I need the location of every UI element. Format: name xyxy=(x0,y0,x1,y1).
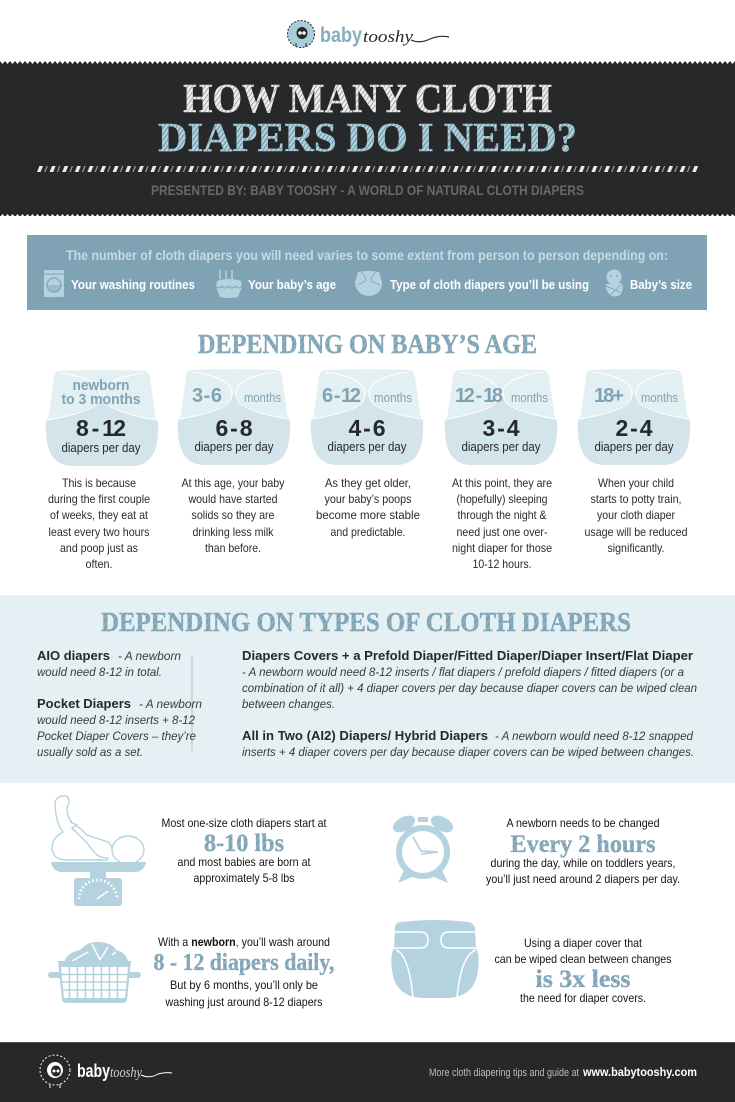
card: 12-18 months: need just one over- xyxy=(456,525,548,539)
text: weight: Most one-size cloth diapers start at xyxy=(162,816,327,830)
logo: baby tooshy top: tooshy xyxy=(363,27,414,46)
text: all in two: - A newborn would need 8-12 snapped xyxy=(495,729,693,743)
card: 6-12 months: As they get older, xyxy=(325,476,411,490)
card: 12-18 months: months xyxy=(511,390,548,405)
text: AIO diapers: AIO diapers xyxy=(37,648,110,663)
text: washing: But by 6 months, you’ll only be xyxy=(170,978,318,992)
card: newborn: to 3 months xyxy=(62,391,140,408)
text: weight: and most babies are born at xyxy=(178,855,311,869)
card: newborn xyxy=(46,370,158,571)
footer link text: More cloth diapering tips and guide at xyxy=(429,1067,579,1079)
text: frequency: Every 2 hours xyxy=(510,831,656,858)
card: 18+ months: months xyxy=(641,390,678,405)
card: 3-6 months: 3 - 6 xyxy=(192,385,222,407)
text: all in two xyxy=(242,728,694,759)
card: 18+ months: significantly. xyxy=(608,541,664,555)
card: 6-12 months: and predictable. xyxy=(330,525,406,539)
card: 3-6 months: solids so they are xyxy=(192,508,275,522)
icon: cloth diaper xyxy=(355,271,382,296)
logo: baby tooshy footer xyxy=(40,1055,172,1088)
text: covers + prefold: - A newborn would need 8-12 inserts / flat diapers / prefold diapers / fitted diapers (or a xyxy=(242,665,684,679)
text: pocket diapers: Pocket Diaper Covers – they’re xyxy=(37,729,196,743)
text: all in two: All in Two (AI2) Diapers/ Hybrid Diapers xyxy=(242,728,488,743)
panel: factors xyxy=(27,235,707,310)
card: 18+ months: diapers per day xyxy=(594,439,674,454)
text: all in two: inserts + 4 diaper covers per day because diaper covers can be wiped between changes. xyxy=(242,745,694,759)
text: covers + prefold xyxy=(242,648,697,711)
text: AIO diapers: - A newborn xyxy=(118,649,181,663)
icon: baby on scale xyxy=(51,796,146,906)
text: frequency: you’ll just need around 2 diapers per day. xyxy=(486,872,680,886)
card: 18+ months: your cloth diaper xyxy=(597,508,675,522)
subtitle: PRESENTED BY: BABY TOOSHY - A WORLD OF NATURAL CLOTH DIAPERS xyxy=(151,182,584,198)
text: covers + prefold: between changes. xyxy=(242,697,335,711)
card: 6-12 months xyxy=(311,369,423,539)
fact: washing xyxy=(48,935,334,1009)
label: washing: Your washing routines xyxy=(71,278,195,292)
card: 3-6 months: 6 - 8 xyxy=(216,415,253,441)
card: 18+ months: 2 - 4 xyxy=(616,415,653,441)
card: newborn: of weeks, they eat at xyxy=(50,508,149,522)
card: 3-6 months: months xyxy=(244,390,281,405)
icon: alarm clock xyxy=(390,812,456,883)
text: cover: is 3x less xyxy=(536,966,631,993)
icon: swaddled baby xyxy=(606,270,623,296)
card: 6-12 months: your baby’s poops xyxy=(324,492,412,506)
heading: types: DEPENDING ON TYPES OF CLOTH DIAPERS xyxy=(101,607,631,637)
card: newborn: newborn xyxy=(72,377,130,394)
card: 12-18 months xyxy=(445,369,557,571)
label: size: Baby’s size xyxy=(630,278,692,292)
logo: baby tooshy footer: baby xyxy=(77,1061,110,1081)
card: 12-18 months: 12 - 18 xyxy=(455,385,503,407)
logo: baby tooshy footer: tooshy xyxy=(110,1065,142,1081)
card: 18+ months: 18+ xyxy=(594,385,624,407)
title: HOW MANY CLOTH xyxy=(183,75,552,121)
logo: baby tooshy top xyxy=(288,20,449,48)
footer link text: www.babytooshy.com xyxy=(582,1067,697,1079)
card: newborn: This is because xyxy=(62,476,136,490)
icon: laundry basket xyxy=(48,942,141,1003)
fact: baby weight xyxy=(51,796,327,906)
card: 18+ months: usage will be reduced xyxy=(584,525,688,539)
text: AIO diapers: would need 8-12 in total. xyxy=(37,665,162,679)
card: newborn: least every two hours xyxy=(48,525,150,539)
header band xyxy=(0,61,735,217)
card: 6-12 months: months xyxy=(374,390,412,405)
card: newborn: and poop just as xyxy=(60,541,138,555)
text: washing: With a newborn, you’ll wash around xyxy=(158,935,330,949)
logo: baby tooshy top: baby xyxy=(320,24,362,47)
text: covers + prefold: Diapers Covers + a Prefold Diaper/Fitted Diaper/Diaper Insert/Flat Diaper xyxy=(242,648,693,663)
text: frequency xyxy=(486,816,680,886)
fact: changing frequency xyxy=(390,812,680,886)
card: 6-12 months: 4 - 6 xyxy=(348,415,386,441)
card: 3-6 months: would have started xyxy=(188,492,278,506)
card: 12-18 months: night diaper for those xyxy=(452,541,552,555)
card: 3-6 months xyxy=(178,369,290,555)
card: newborn: diapers per day xyxy=(62,440,141,455)
text: covers + prefold: combination of it all) + 4 diaper covers per day because diaper covers can be wiped clean xyxy=(242,681,697,695)
text: pocket diapers xyxy=(37,696,202,759)
card: 3-6 months: diapers per day xyxy=(194,439,274,454)
card: 18+ months: When your child xyxy=(598,476,674,490)
card: newborn: often. xyxy=(86,557,112,571)
text: pocket diapers: would need 8-12 inserts + 8-12 xyxy=(37,713,195,727)
card: 6-12 months: become more stable xyxy=(316,508,420,522)
card: 3-6 months: drinking less milk xyxy=(192,525,274,539)
fact: diaper cover xyxy=(391,920,672,1005)
card: 12-18 months: At this point, they are xyxy=(452,476,552,490)
text: cover: Using a diaper cover that xyxy=(524,936,643,950)
text: frequency: during the day, while on toddlers years, xyxy=(490,856,676,870)
footer link text xyxy=(429,1067,697,1079)
footer xyxy=(0,1042,735,1102)
text: frequency: A newborn needs to be changed xyxy=(506,816,660,830)
label: type: Type of cloth diapers you’ll be using xyxy=(390,278,589,292)
panel: types of cloth diapers xyxy=(0,595,735,783)
card: newborn: during the first couple xyxy=(48,492,150,506)
text: cover: can be wiped clean between changes xyxy=(494,952,672,966)
title xyxy=(158,75,577,160)
card: 3-6 months: At this age, your baby xyxy=(182,476,284,490)
card: 3-6 months: than before. xyxy=(205,541,261,555)
factors intro: The number of cloth diapers you will need varies to some extent from person to person depending on: xyxy=(66,247,668,263)
card: 6-12 months: 6 - 12 xyxy=(322,385,361,407)
card: 12-18 months: diapers per day xyxy=(462,439,541,454)
card: 12-18 months: (hopefully) sleeping xyxy=(456,492,548,506)
text: washing: 8 - 12 diapers daily, xyxy=(154,950,334,976)
text: pocket diapers: - A newborn xyxy=(139,697,202,711)
title: DIAPERS DO I NEED? xyxy=(158,114,577,160)
text: cover xyxy=(494,936,672,1005)
icon: cake xyxy=(216,270,242,298)
label: age: Your baby’s age xyxy=(248,278,336,292)
text: weight: 8-10 lbs xyxy=(204,830,284,857)
card: 18+ months xyxy=(578,369,690,555)
icon: washing machine xyxy=(44,270,64,297)
icon: diaper cover xyxy=(391,920,479,998)
text: washing xyxy=(154,935,334,1009)
text: AIO diapers xyxy=(37,648,181,679)
text: weight: approximately 5-8 lbs xyxy=(194,871,294,885)
text: pocket diapers: Pocket Diapers xyxy=(37,696,131,711)
card: 12-18 months: through the night & xyxy=(458,508,546,522)
heading: age: DEPENDING ON BABY’S AGE xyxy=(198,329,537,359)
card: newborn: 8 - 12 xyxy=(76,415,126,441)
card: 6-12 months: diapers per day xyxy=(328,439,407,454)
text: cover: the need for diaper covers. xyxy=(520,991,646,1005)
card: 12-18 months: 3 - 4 xyxy=(482,415,520,441)
text: weight xyxy=(162,816,327,885)
text: pocket diapers: usually sold as a set. xyxy=(37,745,143,759)
text: washing: washing just around 8-12 diapers xyxy=(165,995,322,1009)
card: 18+ months: starts to potty train, xyxy=(590,492,682,506)
card: 12-18 months: 10-12 hours. xyxy=(472,557,532,571)
